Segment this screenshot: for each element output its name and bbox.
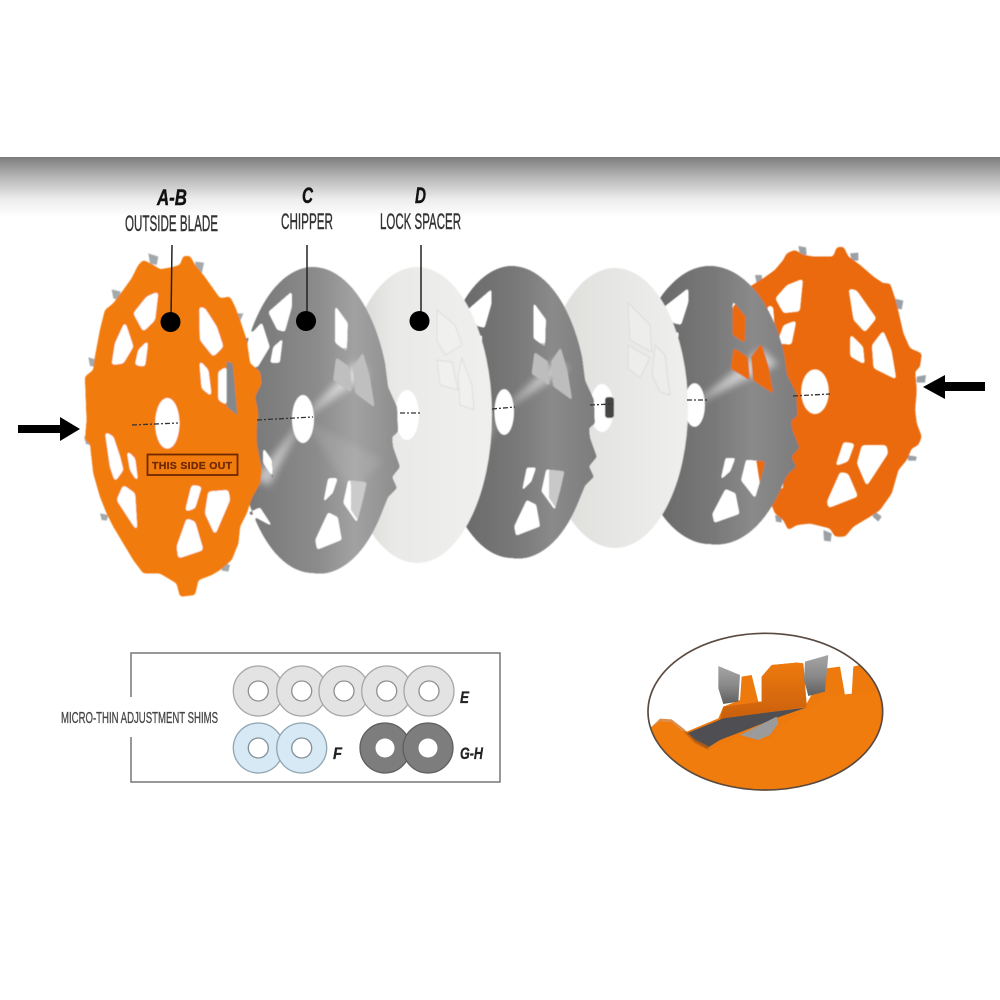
right orange outside blade <box>723 246 926 542</box>
shims E <box>233 666 454 716</box>
grey top band <box>0 157 1000 217</box>
inset: blade tooth close-up <box>640 633 893 797</box>
panel: adjustment shims <box>61 653 500 782</box>
shim letters: G-H <box>460 744 484 763</box>
this side out badge: THIS SIDE OUT <box>152 460 233 472</box>
left orange outside blade <box>84 253 262 597</box>
arrow: left side pointing right <box>18 417 80 441</box>
label: A-B outside blade: A-B <box>156 185 187 210</box>
shims G-H <box>360 723 453 773</box>
label: C chipper: C <box>302 183 314 208</box>
exploded blade diagram <box>0 157 1000 791</box>
shims heading: MICRO-THIN ADJUSTMENT SHIMS <box>61 710 218 727</box>
lock spacer 2 <box>542 268 688 548</box>
chipper 2 <box>464 265 597 560</box>
chipper 1 <box>237 267 400 574</box>
disc stack <box>84 246 926 597</box>
arrow: right side pointing left <box>923 375 985 399</box>
label: A-B outside blade <box>125 185 218 332</box>
label: D lock spacer: D <box>415 183 426 208</box>
shim letters: E <box>460 688 470 707</box>
shims F <box>233 723 327 773</box>
label: D lock spacer <box>380 183 461 331</box>
axis dashed lines <box>132 394 830 425</box>
this side out badge <box>148 454 238 475</box>
lock spacer 1 <box>342 267 492 563</box>
label: C chipper: CHIPPER <box>281 209 333 234</box>
label: A-B outside blade: OUTSIDE BLADE <box>125 211 218 236</box>
label: C chipper <box>281 183 333 331</box>
label: D lock spacer: LOCK SPACER <box>380 209 461 234</box>
chipper 3 <box>660 265 800 546</box>
shim letters <box>333 688 484 763</box>
shim letters: F <box>333 744 343 763</box>
